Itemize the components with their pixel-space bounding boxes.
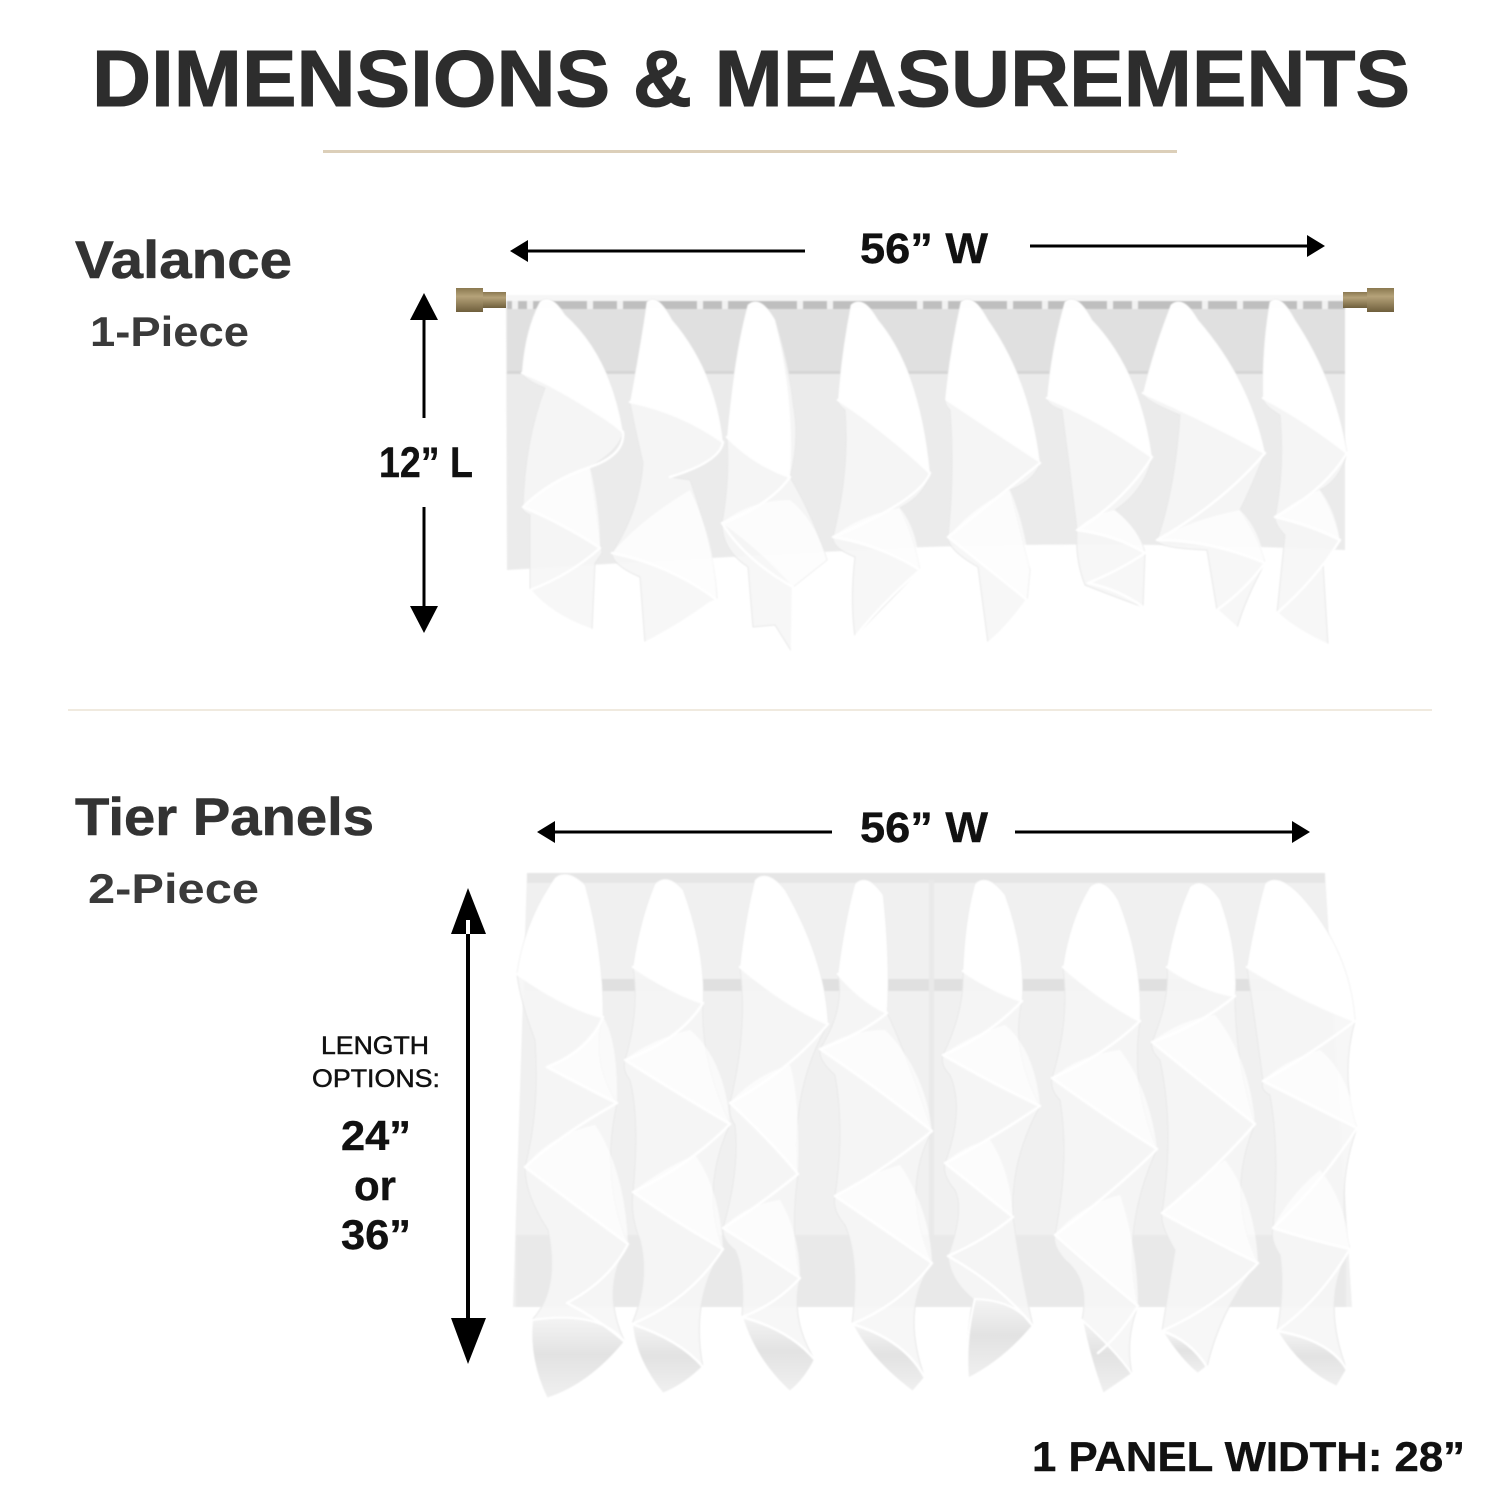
ruffle 1 — [522, 299, 623, 630]
ruffle column 3 — [723, 876, 828, 1392]
text: length options — [312, 1032, 440, 1258]
ruffle column 5 — [942, 880, 1040, 1379]
arrow: tier width right — [1015, 821, 1310, 843]
ruffle column 7 — [1152, 883, 1258, 1374]
ruffle 4 — [833, 302, 930, 637]
dimension: tier width: 56” W — [860, 804, 988, 852]
arrow: tier width left — [537, 821, 832, 843]
ruffle 5 — [945, 299, 1040, 643]
heading: tier panels: Tier Panels — [75, 788, 374, 847]
arrow: valance width right — [1030, 235, 1325, 257]
ruffle column 1 — [517, 874, 628, 1399]
text: length options: or — [354, 1162, 396, 1209]
heading: valance: Valance — [75, 231, 292, 290]
text: 1-piece: 1-Piece — [90, 308, 249, 355]
text: length options: LENGTH — [321, 1032, 429, 1060]
ruffle 8 — [1263, 299, 1347, 645]
arrow: valance length down — [410, 507, 438, 633]
ruffle 7 — [1143, 302, 1265, 628]
ruffle 6 — [1047, 299, 1152, 607]
text: length options: 36” — [341, 1211, 411, 1258]
ruffle 2 — [612, 299, 723, 643]
dimension: valance width: 56” W — [860, 225, 988, 273]
image: valance curtain — [456, 288, 1394, 652]
ruffle column 8 — [1247, 880, 1357, 1387]
arrow: valance width left — [510, 240, 805, 262]
ruffle column 4 — [820, 880, 932, 1392]
arrow: tier length — [451, 888, 486, 1364]
text: 2-piece: 2-Piece — [88, 865, 259, 912]
image: tier curtain — [513, 873, 1357, 1399]
dimension: valance length: 12” L — [379, 439, 473, 487]
text: panel width: 1 PANEL WIDTH: 28” — [1032, 1433, 1465, 1480]
ruffle column 6 — [1052, 883, 1157, 1394]
text: length options: 24” — [341, 1112, 411, 1159]
panel: tier panels — [75, 788, 1465, 1480]
panel: valance — [75, 225, 1394, 652]
title: DIMENSIONS & MEASUREMENTS — [92, 34, 1410, 123]
arrow: valance length up — [410, 293, 438, 418]
ruffle 3 — [722, 302, 827, 652]
icon: left finial — [456, 288, 506, 312]
ruffle column 2 — [624, 879, 730, 1394]
text: length options: OPTIONS: — [312, 1065, 440, 1093]
icon: right finial — [1343, 288, 1394, 312]
